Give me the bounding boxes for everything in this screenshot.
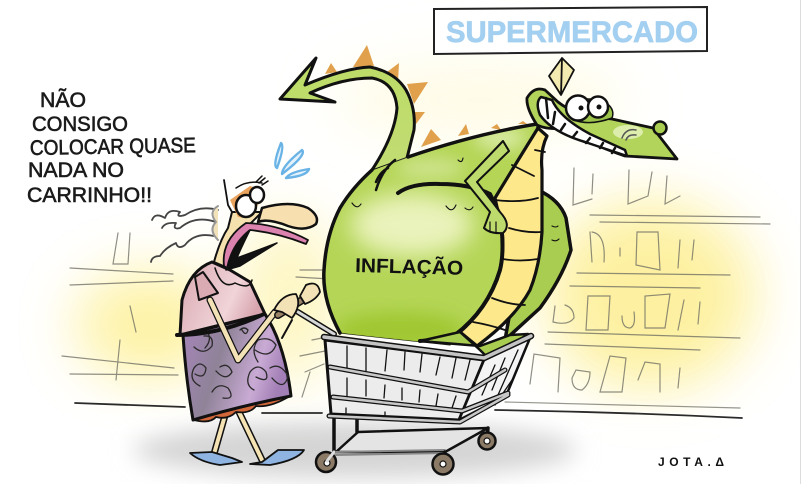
speech text: NADA NO [28,159,124,182]
woman arm [210,300,275,360]
dragon arm [465,141,509,233]
dragon [280,45,677,348]
sign: supermercado [434,7,707,54]
shopping cart [298,312,531,474]
woman [151,143,320,465]
woman neck and face [214,212,262,268]
speech text: COLOCAR QUASE [30,134,196,160]
cart basket [325,340,484,420]
woman sleeve [195,272,218,300]
woman skirt hem [194,392,290,421]
woman shoes [190,452,242,465]
dragon rear leg [505,190,571,340]
dragon yellow belly [460,128,547,346]
dragon skin marks [352,158,559,241]
dragon crest [549,58,574,95]
woman blouse [180,262,265,335]
dragon eyes [566,99,613,123]
dragon belly outline [398,184,502,341]
woman skirt [183,314,291,420]
signature: JOTA.Δ [658,455,724,469]
woman collar [215,268,252,286]
image edge [800,0,801,484]
dragon label: INFLAÇÃO [355,254,463,280]
woman mouth [226,230,277,270]
woman hand on handle [278,294,312,315]
dragon nostril [654,122,666,134]
floor shadow [133,422,577,478]
dragon spikes [325,45,527,147]
dragon tail [280,58,414,172]
cart handle bar [298,312,334,334]
speech text [27,88,196,207]
dragon head [527,89,677,159]
woman legs [214,412,263,462]
speech text: NÃO [40,88,86,112]
woman nose [258,204,317,229]
dragon body [324,124,537,348]
woman hair curls [151,208,218,262]
woman eye patch [230,186,263,218]
woman glasses [236,195,256,217]
dragon mouth and teeth [538,97,627,156]
speech text: CONSIGO [32,113,128,136]
cart rim and rails [324,336,531,358]
cart wheels [316,452,336,472]
sign: supermercado: SUPERMERCADO [446,16,698,49]
sweat drops [275,143,309,178]
shelves [62,168,770,418]
speech text: CARRINHO!! [27,184,152,207]
cart green contents [420,332,528,360]
cart lower rack [336,428,488,452]
